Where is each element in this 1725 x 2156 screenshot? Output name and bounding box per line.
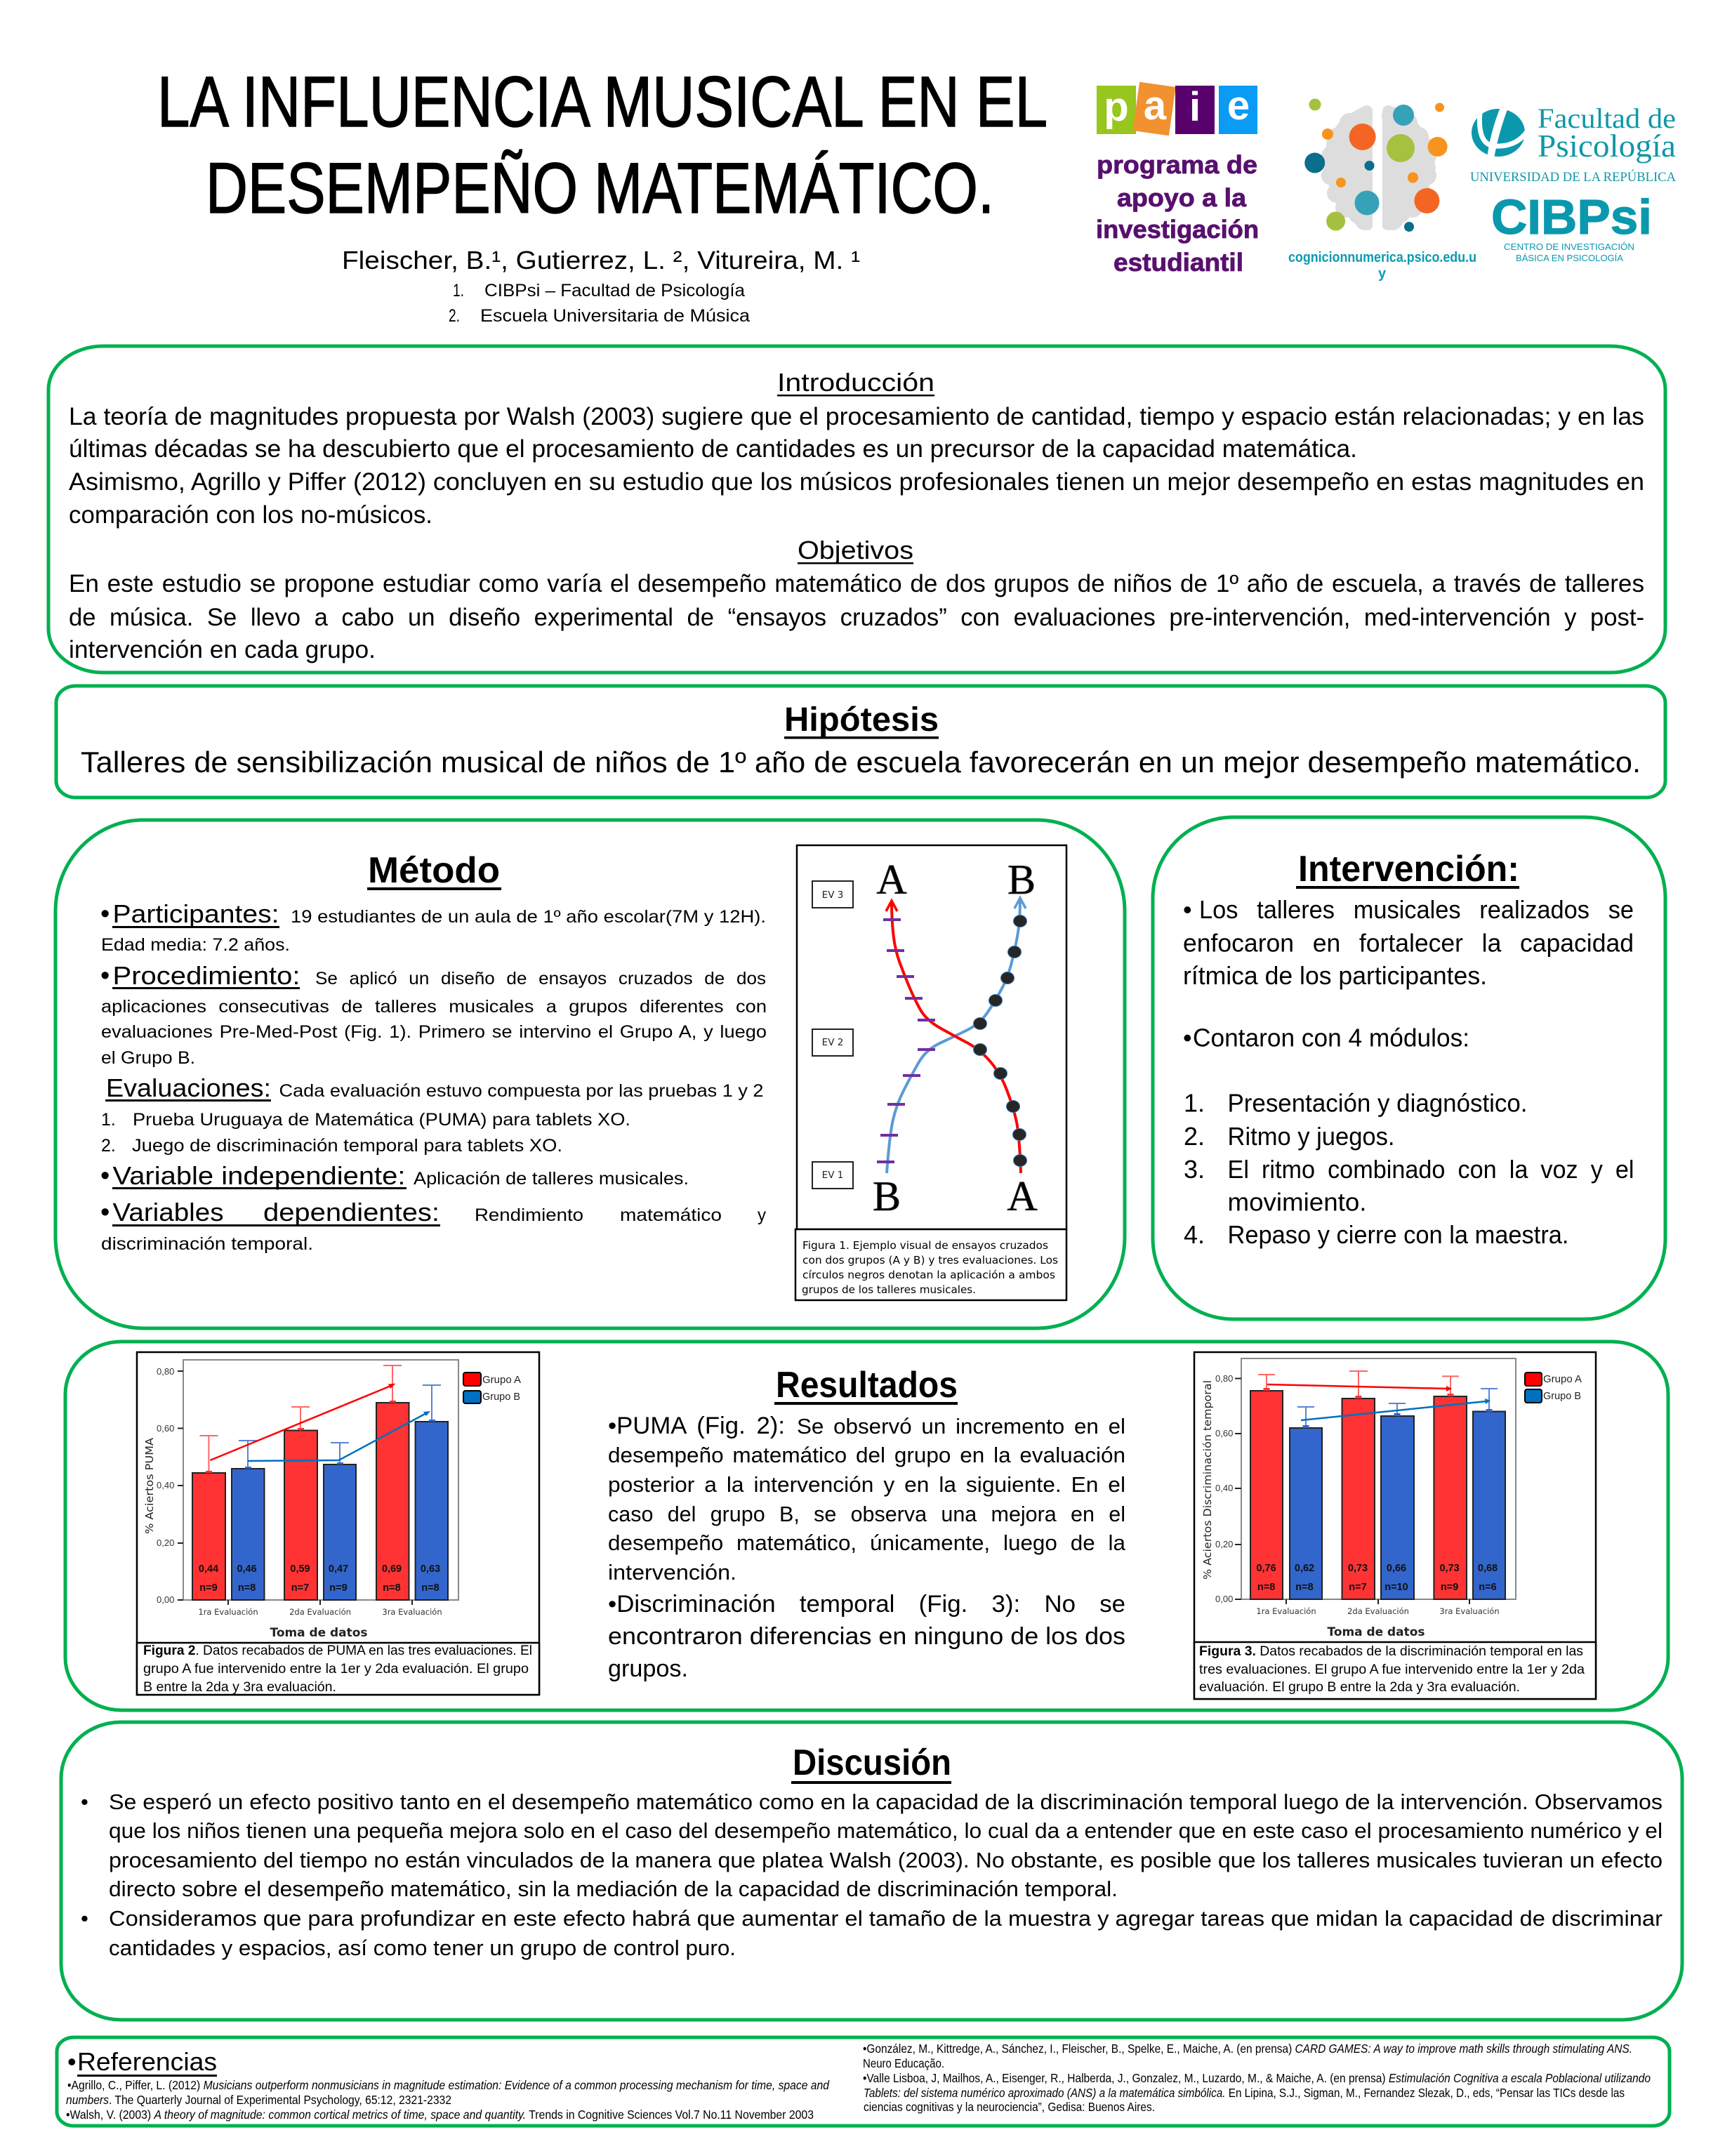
label: EV 3 [812, 881, 853, 908]
text block: PUMA: desempeño matemático del grupo en la evaluación [608, 1443, 1125, 1467]
text block: variables dependientes: matemático [620, 1205, 722, 1225]
heading: Introducción: Introducción [777, 368, 934, 397]
x axis: 2da Evaluación [1347, 1606, 1409, 1616]
heading: Referencias: • [67, 2047, 77, 2076]
bar values [1256, 1563, 1498, 1593]
bar values: 0,46 [237, 1563, 257, 1575]
bar values: 0,63 [421, 1563, 440, 1575]
logo: paie: programa de [1097, 150, 1257, 179]
caption: figura 1: grupos de los talleres musicales. [802, 1283, 976, 1296]
references: right column [863, 2042, 1651, 2114]
text block: evaluaciones: 1. [101, 1110, 116, 1130]
caption: figura 3: tres evaluaciones. El grupo A fue intervenido entre la 1er y 2da [1199, 1662, 1585, 1677]
y axis: % Aciertos Discriminación temporal [1201, 1380, 1214, 1580]
legend: Grupo B [482, 1391, 520, 1403]
curve: grupo B (blue) [887, 898, 1026, 1173]
y axis: 0,00 [1215, 1594, 1233, 1604]
logo: paie: e [1227, 83, 1250, 128]
panel: resultados [65, 1342, 1668, 1710]
references: right column: •Valle Lisboa, J, Mailhos, A., Eisenger, R., Halberda, J., Gonzalez, M., Luzardo, M., & Maiche, A. (en prensa) Estimulación Cognitiva a escala Poblacional utilizando [863, 2071, 1651, 2085]
y axis: % Aciertos PUMA [143, 1438, 156, 1534]
plot frame [1241, 1358, 1516, 1599]
logo: Facultad de Psicología: UNIVERSIDAD DE LA REPÚBLICA [1470, 169, 1676, 185]
bar values: n=7 [1349, 1582, 1367, 1593]
plot frame [183, 1360, 458, 1600]
text block: talleres: enfocaron en fortalecer la capacidad [1183, 928, 1634, 958]
logo: paie: investigación [1096, 215, 1259, 244]
text block: discriminación temporal: encontraron diferencias en ninguno de los dos [608, 1623, 1125, 1650]
x axis: Toma de datos [270, 1626, 368, 1639]
text block: PUMA: posterior a la intervención y en la siguiente. En el [608, 1472, 1125, 1497]
text block: objetivos: intervención en cada grupo. [69, 636, 376, 663]
authors and affiliations: Escuela Universitaria de Música [480, 306, 750, 326]
label: EV 2 [812, 1029, 853, 1056]
text block: introducción: La teoría de magnitudes propuesta por Walsh (2003) sugiere que el procesamiento de cantidad, tiempo y espacio están relacionadas; y en las [69, 403, 1644, 430]
text block: introducción: Asimismo, Agrillo y Piffer (2012) concluyen en su estudio que los músicos profesionales tienen un mejor desempeño en estas magnitudes en [69, 468, 1644, 496]
heading: Hipótesis: Hipótesis [784, 701, 939, 739]
text block: variables dependientes: y [758, 1205, 766, 1225]
legend: Grupo B [1543, 1390, 1581, 1402]
y axis [1201, 1373, 1241, 1604]
bar values: n=8 [1257, 1582, 1275, 1593]
arrow: grupo B [1301, 1398, 1491, 1420]
text block: evaluaciones: Juego de discriminación temporal para tablets XO. [132, 1136, 562, 1156]
references: left column [66, 2078, 830, 2122]
text block: discusión: que los niños tienen una pequeña mejora solo en el caso del desempeño matemático, lo cual da a entender que en este caso el procesamiento numérico y el [109, 1818, 1663, 1843]
group letters: A [876, 857, 907, 903]
panel: intervención [1153, 817, 1665, 1319]
heading: Objetivos: Objetivos [798, 536, 913, 564]
text block: objetivos: En este estudio se propone estudiar como varía el desempeño matemático de dos grupos de niños de 1º año de escuela, a través de talleres [69, 570, 1644, 597]
bar values: n=6 [1479, 1582, 1497, 1593]
text block: variable independiente: Variable independiente: [112, 1161, 406, 1190]
bar values: 0,44 [199, 1563, 218, 1575]
logo: paie: a [1144, 83, 1167, 128]
text block: discusión: • [81, 1906, 88, 1931]
x axis [198, 1600, 442, 1639]
list: módulos: Repaso y cierre con la maestra. [1227, 1220, 1568, 1249]
figure 2: gráfico PUMA [137, 1352, 539, 1695]
bar values: 0,47 [329, 1563, 348, 1575]
text block: talleres: • [1183, 1024, 1192, 1052]
text block: variable independiente: • [100, 1161, 110, 1191]
text block: evaluaciones: Prueba Uruguaya de Matemática (PUMA) para tablets XO. [133, 1110, 630, 1130]
y axis: 0,80 [157, 1366, 174, 1377]
text block: procedimiento: evaluaciones Pre-Med-Post (Fig. 1). Primero se intervino el Grupo A, y luego [101, 1022, 767, 1042]
list: módulos [1184, 1088, 1634, 1249]
y axis: 0,20 [1215, 1539, 1233, 1549]
legend [1525, 1373, 1582, 1403]
references: left column: •Walsh, V. (2003) A theory of magnitude: common cortical metrics of time, space and quantity. Trends in Cognitive Sciences Vol.7 No.11 November 2003 [66, 2108, 814, 2122]
text block: talleres: Los talleres musicales realizados se [1199, 895, 1634, 924]
bar values: 0,73 [1439, 1563, 1460, 1574]
text block: talleres: • [1183, 895, 1192, 924]
y axis: 0,40 [157, 1480, 174, 1490]
text block: variable independiente: Aplicación de talleres musicales. [414, 1169, 689, 1189]
text block: discriminación temporal: •Discriminación temporal (Fig. 3): No se [608, 1591, 1125, 1618]
caption: figura 1: círculos negros denotan la aplicación a ambos [802, 1269, 1055, 1281]
caption: figura 3 [1194, 1642, 1596, 1699]
logo: Facultad de Psicología [1470, 102, 1676, 185]
text block: discusión: directo sobre el desempeño matemático, sin la mediación de la capacidad de discriminación temporal. [109, 1877, 1118, 1901]
group letters [873, 857, 1038, 1219]
references: right column: Tablets: del sistema numérico aproximado (ANS) a la matemática simbólica. En Lipina, S.J., Sigman, M., Fernandez Slezak, D., eds, “Pensar las TICs desde las [864, 2086, 1625, 2100]
text block: variable independiente [100, 1161, 689, 1191]
text block: objetivos [69, 570, 1644, 663]
logo: paie: i [1189, 84, 1201, 130]
bar values [199, 1563, 440, 1594]
bar values: n=8 [238, 1582, 256, 1594]
text block: PUMA: caso del grupo B, se observa una mejora en el [608, 1502, 1125, 1526]
text block: objetivos: de música. Se llevo a cabo un diseño experimental de “ensayos cruzados” con evaluaciones pre-intervención, med-intervención y post- [69, 604, 1644, 631]
caption: figura 2: grupo A fue intervenido entre la 1er y 2da evaluación. El grupo [143, 1662, 529, 1676]
caption: figura 3: evaluación. El grupo B entre la 2da y 3ra evaluación. [1199, 1680, 1520, 1695]
list: módulos: 1. [1184, 1088, 1205, 1118]
authors and affiliations: CIBPsi – Facultad de Psicología [484, 281, 745, 300]
references: right column: Neuro Educação. [863, 2056, 944, 2070]
logo: cognición numérica brain [1288, 98, 1476, 282]
y axis: 0,00 [157, 1594, 174, 1605]
logo: paie: p [1104, 84, 1129, 130]
bar values: n=9 [329, 1582, 348, 1594]
curve: grupo A (red) [886, 901, 1021, 1173]
text block: introducción [69, 403, 1644, 529]
text block: discusión: Consideramos que para profundizar en este efecto habrá que aumentar el tamaño de la muestra y agregar tareas que midan la capacidad de discriminar [109, 1906, 1663, 1931]
group letters: B [873, 1173, 901, 1219]
text block: evaluaciones [101, 1073, 764, 1156]
logo: CIBPsi: CENTRO DE INVESTIGACIÓN [1504, 242, 1634, 252]
caption: figura 2: B entre la 2da y 3ra evaluación. [143, 1680, 336, 1695]
text block: discusión: procesamiento del tiempo no están vinculados de la manera que platea Walsh (2003). No obstante, es posible que los talleres musicales tuvieran un efecto [109, 1848, 1663, 1872]
text block: participantes: Participantes: [112, 899, 279, 928]
text block: variables dependientes [100, 1198, 766, 1254]
label: EV 1 [812, 1162, 853, 1189]
text block: PUMA: desempeño matemático, únicamente, luego de la [608, 1530, 1126, 1555]
x axis [1256, 1599, 1500, 1639]
text block: participantes: Edad media: 7.2 años. [101, 935, 290, 955]
heading: Intervención: Intervención: [1298, 849, 1519, 889]
legend: Grupo A [1543, 1373, 1582, 1385]
panel: método [55, 820, 1125, 1328]
title: LA INFLUENCIA MUSICAL EN EL [157, 62, 1047, 142]
bar values: 0,69 [382, 1563, 402, 1575]
bar values: 0,68 [1478, 1563, 1498, 1574]
x axis: Toma de datos [1327, 1625, 1425, 1639]
text block: discriminación temporal: grupos. [608, 1655, 688, 1682]
caption: figura 1: Figura 1. Ejemplo visual de ensayos cruzados [802, 1239, 1048, 1252]
text block: discriminación temporal [608, 1591, 1125, 1682]
logo: cognición numérica brain: cognicionnumerica.psico.edu.u [1288, 250, 1476, 265]
text block: procedimiento: Se aplicó un diseño de ensayos cruzados de dos [315, 969, 766, 988]
authors and affiliations [342, 246, 860, 326]
bar values: 0,73 [1348, 1563, 1368, 1574]
error bars [1258, 1371, 1498, 1428]
panel: introducción y objetivos [48, 346, 1665, 673]
logo: CIBPsi: CIBPsi [1491, 190, 1652, 244]
references: right column: ciencias cognitivas y la neurociencia”, Gedisa: Buenos Aires. [864, 2100, 1155, 2114]
x axis: 3ra Evaluación [382, 1607, 442, 1617]
text block: evaluaciones: Cada evaluación estuvo compuesta por las pruebas 1 y 2 [279, 1081, 764, 1101]
text block: variables dependientes: Rendimiento [475, 1205, 583, 1225]
bar values: n=8 [383, 1582, 401, 1594]
text block: variables dependientes: discriminación temporal. [101, 1234, 313, 1254]
text block: PUMA [608, 1413, 1126, 1585]
logo: CIBPsi: BÁSICA EN PSICOLOGÍA [1516, 253, 1623, 263]
text block: variables dependientes: dependientes: [263, 1198, 439, 1226]
title: DESEMPEÑO MATEMÁTICO. [206, 148, 994, 228]
logo: cognición numérica brain: y [1378, 266, 1387, 282]
bar values: n=7 [291, 1582, 309, 1594]
circles: aplicación de talleres [973, 915, 1026, 1167]
text block: talleres [1183, 895, 1634, 1052]
references: left column: numbers. The Quarterly Journal of Experimental Psychology, 65:12, 2321-2332 [66, 2093, 451, 2107]
label: EV 2: EV 2 [822, 1037, 843, 1048]
arrow: grupo B [248, 1411, 430, 1461]
bar values: n=8 [1295, 1582, 1314, 1593]
text block: participantes: • [100, 899, 110, 929]
text block: talleres: Contaron con 4 módulos: [1193, 1024, 1469, 1052]
text block: procedimiento [100, 961, 767, 1068]
logo: paie [1096, 82, 1259, 277]
bar values: 0,59 [290, 1563, 310, 1575]
text block: PUMA: intervención. [608, 1560, 736, 1585]
bar values: 0,62 [1295, 1563, 1314, 1574]
y axis: 0,60 [157, 1423, 174, 1434]
x axis: 2da Evaluación [289, 1607, 351, 1617]
heading: Resultados: Resultados [776, 1365, 958, 1406]
x axis: 1ra Evaluación [198, 1607, 258, 1617]
text block: discusión: Se esperó un efecto positivo tanto en el desempeño matemático como en la capacidad de la discriminación temporal luego de la intervención. Observamos [109, 1790, 1663, 1814]
label: EV 3: EV 3 [822, 889, 843, 901]
bar values: n=9 [199, 1582, 218, 1594]
bar values: n=9 [1441, 1582, 1458, 1593]
text block: variables dependientes: Variables [112, 1198, 223, 1226]
caption: figura 2 [137, 1643, 539, 1695]
group letters: B [1007, 857, 1036, 903]
figure 1: diseño de ensayos cruzados [795, 845, 1066, 1300]
text block: introducción: comparación con los no-músicos. [69, 501, 432, 529]
text block: talleres: rítmica de los participantes. [1183, 961, 1487, 990]
list: módulos: Ritmo y juegos. [1227, 1122, 1394, 1151]
logo: Facultad de Psicología: Psicología [1538, 128, 1676, 164]
text block: participantes: 19 estudiantes de un aula de 1º año escolar(7M y 12H). [291, 907, 766, 927]
group letters: A [1007, 1173, 1038, 1219]
list: módulos: 3. [1184, 1155, 1205, 1184]
legend: Grupo A [482, 1374, 521, 1386]
list: módulos: El ritmo combinado con la voz y el [1227, 1155, 1634, 1184]
heading: Método: Método [368, 850, 500, 891]
label: EV 1: EV 1 [822, 1170, 843, 1181]
panel: referencias [57, 2037, 1670, 2126]
bar values: 0,76 [1256, 1563, 1276, 1574]
text: hipótesis: Talleres de sensibilización musical de niños de 1º año de escuela favorecerán en un mejor desempeño matemático. [81, 746, 1641, 779]
text block: procedimiento: Procedimiento: [112, 961, 300, 990]
figure 3: gráfico discriminación temporal [1194, 1352, 1596, 1699]
list: módulos: 2. [1184, 1122, 1205, 1151]
caption: figura 3: Figura 3. Datos recabados de la discriminación temporal en las [1199, 1644, 1583, 1659]
y axis: 0,60 [1215, 1428, 1233, 1439]
caption: figura 1: con dos grupos (A y B) y tres evaluaciones. Los [802, 1254, 1058, 1267]
text block: discusión: • [81, 1790, 88, 1814]
authors and affiliations: 2. [449, 306, 460, 326]
y axis [143, 1366, 183, 1605]
y axis: 0,80 [1215, 1373, 1233, 1384]
list: módulos: movimiento. [1227, 1188, 1366, 1216]
x axis: 1ra Evaluación [1256, 1606, 1316, 1616]
text block: procedimiento: aplicaciones consecutivas de talleres musicales a grupos diferentes con [101, 997, 767, 1017]
logo: Facultad de Psicología: Facultad de [1538, 102, 1676, 134]
bar values: n=8 [421, 1582, 439, 1594]
text block: discusión [81, 1790, 1663, 1960]
text block: participantes [100, 899, 766, 955]
references: left column: •Agrillo, C., Piffer, L. (2012) Musicians outperform nonmusicians in magnitude estimation: Evidence of a common processing mechanism for time, space and [67, 2078, 830, 2092]
bars [1250, 1391, 1505, 1599]
references: right column: •González, M., Kittredge, A., Sánchez, I., Fleischer, B., Spelke, E., Maiche, A. (en prensa) CARD GAMES: A way to improve math skills through stimulating ANS. [863, 2042, 1632, 2056]
text block: evaluaciones: Evaluaciones: [106, 1073, 271, 1102]
text block: evaluaciones: 2. [101, 1136, 116, 1156]
arrow: grupo A [210, 1384, 396, 1460]
heading: Referencias: Referencias [77, 2047, 217, 2076]
bar values: n=10 [1384, 1582, 1408, 1593]
text block: procedimiento: el Grupo B. [101, 1048, 195, 1068]
panel: discusión [61, 1722, 1682, 2020]
text block: procedimiento: • [100, 961, 110, 991]
arrow: grupo A [1267, 1384, 1452, 1391]
bar values: 0,66 [1387, 1563, 1406, 1574]
error bars [199, 1365, 441, 1473]
caption: figura 1 [795, 1229, 1066, 1300]
title [157, 62, 1047, 228]
authors and affiliations: 1. [453, 281, 464, 300]
text block: PUMA: •PUMA (Fig. 2): [608, 1413, 785, 1439]
caption: figura 2: Figura 2. Datos recabados de PUMA en las tres evaluaciones. El [143, 1644, 532, 1658]
panel: hipótesis [56, 686, 1665, 798]
text block: PUMA: Se observó un incremento en el [797, 1414, 1125, 1439]
text block: discusión: cantidades y espacios, así como tener un grupo de control puro. [109, 1936, 736, 1960]
legend [463, 1373, 521, 1403]
text block: variables dependientes: • [100, 1198, 110, 1227]
bars [192, 1403, 448, 1600]
y axis: 0,20 [157, 1537, 174, 1548]
logo: paie: estudiantil [1113, 248, 1243, 277]
text block: introducción: últimas décadas se ha descubierto que el procesamiento de cantidades es un precursor de la capacidad matemática. [69, 435, 1357, 463]
logo: paie: apoyo a la [1117, 183, 1247, 212]
list: módulos: Presentación y diagnóstico. [1227, 1088, 1528, 1118]
authors and affiliations: Fleischer, B.¹, Gutierrez, L. ², Vitureira, M. ¹ [342, 246, 860, 275]
x axis: 3ra Evaluación [1439, 1606, 1500, 1616]
tick marks: sin taller [877, 918, 935, 1163]
y axis: 0,40 [1215, 1483, 1233, 1493]
list: módulos: 4. [1184, 1220, 1205, 1249]
heading: Discusión: Discusión [793, 1742, 951, 1783]
